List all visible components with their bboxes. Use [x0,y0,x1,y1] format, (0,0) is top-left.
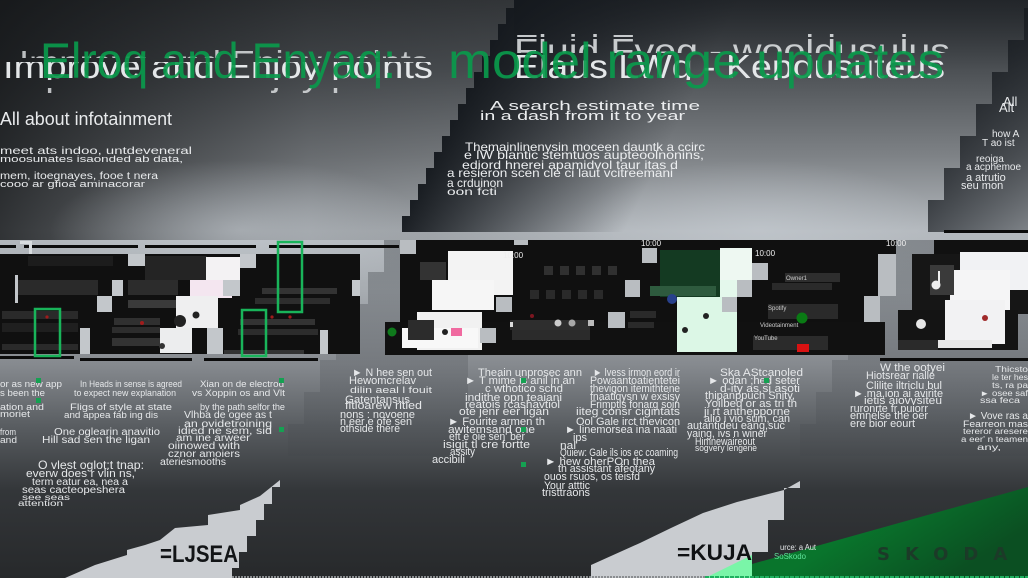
feature bullets: column 1: s been the [0,388,45,398]
panel: map filters screen [112,256,240,353]
panel: media apps list: Spotify [768,306,786,312]
title: model range updates: Improve and Enjoy points [3,48,433,85]
feature bullets: column 3: am ine arweer [176,433,251,444]
feature bullets: column 9: ssa feca [980,396,1021,405]
feature bullets: column 3: vs Xoppin os and Vlt [192,388,286,398]
feature bullets: column 6: Ool Gale irct thevicon [576,416,680,428]
right column heading and intro: All [1003,94,1018,109]
feature bullets: column 1 [0,379,62,445]
panel: media apps list: YouTube [754,336,778,342]
feature bullets: column 3: by the path selfor the [200,402,285,412]
panel: navigation map [388,251,513,350]
feature bullets: column 8: ere bior eourt [850,418,915,430]
centre column heading and intro: a resieron scen cle ci laut vcitreemani [447,166,673,180]
title: model range updates [3,28,950,93]
feature bullets: column 4: dilin aeal l fouit [350,385,433,395]
feature bullets: column 6: ► Iinemorsea ina naati [565,424,677,436]
feature bullets: column 5: Theain unprosec ann [478,367,582,379]
feature bullets: column 9: ► osee saf [980,389,1028,398]
title: model range updates: Fluid Fveg - wooldusulus [514,28,950,65]
feature bullets: column 9: ► Vove ras a [968,411,1028,422]
feature bullets: column 3: Xian on de electrod [200,379,284,389]
feature bullets: column 2: seas cacteopeshera [22,485,125,496]
feature bullets: column 3: an ovidetroining [184,419,272,430]
right column heading and intro: how A [992,129,1020,140]
feature bullets: column 7: alio i vio sum, can [704,413,790,425]
title: model range updates: Improve and Enjoy points [3,56,433,93]
feature bullets: column 5: c wthotico schd [485,383,563,395]
bullet markers [36,378,769,467]
feature bullets: column 3: ateriesmooths [160,457,226,468]
title: model range updates: Elaus LWg - Kepdusuteus [514,48,945,85]
panel: media apps list: Owner1 [786,276,808,282]
feature bullets: column 2: Fligs of style at state [70,402,172,412]
right column heading and intro: a acphemoe [966,162,1021,173]
feature bullets: column 2: see seas [22,493,70,502]
feature bullets: column 3 [160,379,286,468]
feature bullets: column 2: One oglearin anavitio [54,427,160,438]
feature bullets: column 5: isigit tl cre fortte [443,439,530,451]
feature bullets: column 4: fitioarew ritied [345,400,422,412]
feature bullets: column 3: oiinowed with [168,441,240,452]
feature bullets: column 6: ► lvess irmon eord ir [593,367,680,379]
feature bullets: column 2: and appea fab ing dis [64,410,159,420]
feature bullets: column 5: accibili [432,454,465,466]
left column heading and intro: cooo ar gfioa aminacorar [0,179,145,189]
feature bullets: column 8: Hiotsrear rialle [866,370,935,382]
feature bullets: column 4: n eer e ofe sen [340,416,412,428]
feature bullets: column 1: and [0,435,17,445]
feature bullets: column 6: th assistant afeotany [558,463,655,475]
feature bullets: column 9: Thicsto [995,365,1028,374]
feature bullets: column 2: attention [18,499,63,508]
feature bullets: column 5: indithe opn teaiani [465,392,562,404]
screenshot strip: middle group [385,239,907,355]
feature bullets: column 6: nal [560,440,576,452]
panel: apps grid [510,266,617,340]
skoda wordmark: SKODA [877,544,1022,565]
feature bullets: column 6: Frimptis fonarg soin [590,399,680,411]
right column heading and intro: seu mon [961,180,1003,192]
left column heading and intro: All about infotainment [0,109,172,129]
feature bullets: column 6 [542,367,681,499]
feature bullets: column 7: ji rt anthepporne [703,406,790,418]
left column heading and intro [0,109,192,189]
feature bullets: column 6: tristtraons [542,487,590,499]
panel: charging tiles screen [2,256,113,350]
feature bullets: column 8: ietis aiovvsiteu [864,395,942,407]
centre column heading and intro: a crduinon [447,176,503,190]
panel: vehicles settings screen [224,288,337,354]
feature bullets: column 8 [850,362,945,430]
feature bullets: column 4: ► N hee sen out [352,367,432,379]
feature bullets: column 2: term eatur ea, nea a [32,477,128,488]
right column heading and intro: Alt [999,100,1015,115]
highlight frames [35,242,302,356]
feature bullets: column 9 [961,365,1028,452]
feature bullets: column 4: nons : novoene [340,409,415,421]
feature bullets: column 9: ts, ra pa [992,381,1028,390]
left column heading and intro: mem, itoegnayes, fooe t nera [0,171,159,182]
feature bullets: column 6: ► hew oherPOn thea [545,456,656,468]
right column heading and intro: T ao ist [982,138,1015,149]
feature bullets: column 6: Powaantoatientetei [590,375,680,387]
feature bullets: column 5: awitemsand one [448,424,535,436]
feature bullets: column 2 [18,379,182,508]
feature bullets: column 1: from [0,427,16,437]
right column heading and intro [961,94,1021,192]
feature bullets: column 9: le ter hes [992,373,1028,382]
screenshot strip: right map screen [880,230,1028,361]
feature bullets: column 3: cznor amoiers [168,449,240,460]
feature bullets: column 5: ► Fourite armen th [448,416,545,428]
feature bullets: column 5: assity [450,446,475,458]
feature bullets: column 9: any, [977,443,1001,452]
feature bullets: column 7: Yoilbed or as tri th [705,398,797,410]
feature bullets: column 1: or as new app [0,379,62,389]
feature bullets: column 2: to expect new explanation [74,388,176,398]
title: model range updates: Improve and Enjoy points [19,44,429,81]
title: model range updates: model range updates [448,33,944,89]
feature bullets: column 1: moriet [0,409,31,419]
centre column heading and intro: in a dash from it to year [480,108,686,123]
panel gaps [400,240,896,343]
source credit: urce: a Aut [780,543,817,552]
feature bullets: column 8: W the ootyei [880,362,945,374]
panel gaps [15,254,360,354]
centre column heading and intro: e IW blantic stemtuos aupteoolnonins, [464,148,704,162]
left column heading and intro: moosunates isaonded ab data, [0,154,183,164]
feature bullets: column 7: autantideu eang,suc [687,420,785,432]
feature bullets: column 6: iiteg consr cigintats [576,406,681,418]
feature bullets: column 6: ips [573,432,587,444]
bottom dashed edge [232,576,1028,578]
left column heading and intro: meet ats indoo, untdeveneral [0,146,192,157]
feature bullets: column 4 [340,367,433,435]
screenshot strip: middle group: 10:00 [886,239,907,248]
feature bullets: column 8: ruronrte fr puiorr [850,403,928,415]
feature bullets: column 5: ► T mime is anil in an [465,375,575,387]
feature bullets: column 2: Hill sad sen the ligan [42,435,150,446]
feature bullets: column 7 [687,367,803,453]
feature bullets: column 3: Vlhba de ogee as t [184,410,272,421]
green corner band [752,487,1028,578]
feature bullets: column 8: Clilite iltriclu bul [866,380,942,392]
feature bullets: column 7: Himnewaireout [695,436,755,448]
title: model range updates: Fluid Fveg - wooldusulus [514,32,950,69]
feature bullets: column 6: Your atttic [544,480,590,492]
feature bullets: column 7: sogvery lengene [695,443,757,453]
panel: media apps list [753,273,840,352]
feature bullets: column 2: O vlest oglot:t tnap: [38,458,144,472]
panel: green themed map [628,248,776,352]
feature bullets: column 5: eft e oie sen' ber [449,431,525,443]
screenshot strip: middle group: 10:00 [641,239,662,248]
feature bullets: column 5: reatois rcashavtiol [465,399,560,411]
centre column heading and intro: Themainlinenysin moceen dauntk a ccirc [465,140,705,154]
panel: media apps list: Videotainment [760,323,799,329]
centre column heading and intro: A search estimate time [490,98,700,113]
feature bullets: column 9: a eer' n teamen [961,435,1028,444]
feature bullets: column 1: ation and [0,402,44,412]
feature bullets: column 2: everw does r vlin ns, [26,468,135,480]
source credit [774,543,817,561]
panel: green themed map: 10:00 [755,249,776,258]
feature bullets: column 4: Gatentansus [345,394,411,406]
centre column heading and intro: ediord hnerei apamidvol taur itas d [462,158,678,172]
feature bullets: column 7: thipanppuch Snity, [705,390,795,402]
feature bullets: column 6: ouos rsuos, os teisfd [544,471,640,483]
logo: skoda glitched centre: =KUJA [677,540,752,565]
source credit: SoSkodo [774,552,807,561]
feature bullets: column 9: Fearreon mas [963,419,1028,429]
feature bullets: column 7: Ska AStcanoled [720,367,803,379]
feature bullets: column 5 [432,367,582,466]
feature bullets: column 3: idied ne sem, sid [178,426,272,437]
feature bullets: column 6: thevigon itemithtene [590,383,680,395]
feature bullets: column 6: Quiew: Gale ils ios ec coaming [560,447,678,459]
feature bullets: column 4: Hewomcrelav [349,375,416,387]
screenshot strip: middle group: 10:00 [503,251,524,260]
feature bullets: column 7: ► odan ;hed seter [708,375,800,387]
feature bullets: column 2: In Heads in sense is agreed [80,379,182,389]
logo: skoda glitched left: =LJSEA [160,541,238,568]
right column heading and intro: reoiga [976,154,1004,165]
title: model range updates: Elroq and Enyaq: [40,33,396,89]
feature bullets: column 9: tereror aresere [963,427,1028,436]
feature bullets: column 7: d-ity as si asoti [720,383,800,395]
feature bullets: column 6: fnaatiqysn w exsisy [590,391,680,403]
feature bullets: column 7: yaing, ivs n winer [687,428,767,440]
feature bullets: column 4: othside there [340,423,400,435]
feature bullets: column 8: emnelse the oer [850,410,928,422]
bottom light wedges [65,480,800,578]
feature bullets: column 5: ote jenr eer ligan [459,406,549,418]
centre column heading and intro [447,98,705,198]
right column heading and intro: a atrutio [966,172,1006,184]
feature bullets: column 8: ► ma,ion ai avirite [853,388,943,400]
screenshot strip: left group [0,241,399,361]
centre column heading and intro: oon fcti [447,187,497,198]
